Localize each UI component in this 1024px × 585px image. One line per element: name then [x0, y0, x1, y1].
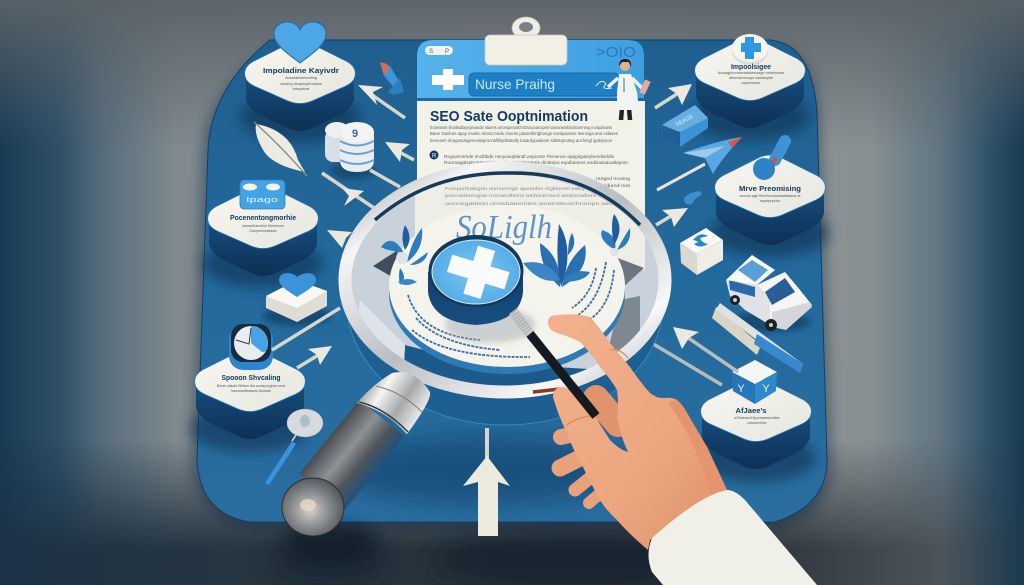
leaves left — [381, 225, 428, 285]
bullet icon — [430, 150, 438, 160]
body text — [430, 125, 631, 189]
tile text — [230, 215, 296, 233]
tile text: vsloonretior — [747, 421, 768, 425]
tile text: hanunaotbaaons Anusbe — [231, 389, 271, 393]
small magnifier — [428, 235, 535, 343]
browser pill: S — [429, 49, 433, 55]
tile text: otherstoncsopt nauilaspite — [729, 76, 773, 80]
tile text: Impoladine Kayivdr — [263, 66, 339, 75]
disc script title: SoLiglh — [456, 209, 552, 246]
tile text: Autoddetsemorting — [285, 76, 317, 80]
tile text — [718, 64, 784, 85]
tile text — [263, 66, 339, 91]
connector: clock rod — [272, 308, 340, 350]
connector: cube rod — [650, 342, 722, 385]
tile text: wexsufhanoline Momenne — [242, 224, 284, 228]
body text: opsidiand nos — [596, 183, 631, 189]
icon: white cross in lens — [442, 239, 514, 305]
body text: Extensish ilnoiltsdlayepinande staens uriorspecialchIOsounanopernoonaneinfoicktoerning nunpdsaets — [430, 125, 612, 131]
document clip and ring — [485, 17, 567, 65]
bullet icon: R — [432, 154, 437, 160]
icon: blue badge: Ipago — [246, 197, 278, 204]
handheld pen — [513, 311, 596, 416]
icon: paper plane on stick — [657, 137, 742, 190]
tile text: sOIsteand llpprmamendlee — [734, 416, 780, 420]
lens interior: ponnadeiengoe nonaeolteins asibisiensed aniitoniafiers vaoienscy — [445, 193, 626, 199]
browser pill: P — [445, 49, 449, 55]
tile text: socnot agh BevHonuoolsalbaland of — [740, 194, 801, 198]
icon: blue joystick — [753, 141, 785, 180]
icon: blue box — [662, 105, 708, 147]
body text: Ruoroagalsphontnonirniagaduasnienitonteris dintitepo eqaibations andiinwiatuatlepion — [444, 160, 628, 166]
panel: web document page — [417, 17, 651, 270]
white disc — [389, 205, 625, 374]
icon: coin stacks: 9 — [352, 128, 358, 140]
year text: >OIO — [596, 44, 636, 61]
arrow: lower right of document — [656, 208, 688, 227]
panel: blue board — [192, 40, 832, 530]
arrow: clock — [297, 346, 332, 368]
arrow: left small — [327, 230, 352, 248]
search bar: Nurse Praihg — [475, 76, 555, 92]
tile: Impoolsigee — [690, 34, 810, 140]
icon: coin stacks — [325, 122, 374, 179]
icon: stethoscope — [265, 409, 323, 485]
leaves top right — [601, 214, 630, 256]
tile: Pocenentongmorhie — [203, 180, 323, 288]
icon: blue heart — [274, 22, 326, 63]
body text: beouneh dnogandogenvalsiprocnblifitydisitedly tosardypaskam siblotqnoting anchingl igatopnon — [430, 138, 612, 144]
icon: white cross — [432, 69, 464, 90]
tile: Spooon Shvcaling — [190, 324, 310, 452]
tile text — [739, 186, 801, 203]
magnifier base — [347, 181, 663, 425]
tile text: oppnrocser — [742, 81, 761, 85]
tile text: AfJaee's — [736, 408, 767, 415]
tile: More Preomising — [710, 141, 830, 257]
magnifier handle — [282, 372, 430, 558]
connector: coin stack rod — [370, 170, 400, 187]
icon: blue cube — [732, 360, 777, 404]
white sleeve — [648, 490, 817, 585]
lens interior: Fumportsalegon onmorenge apeanlsn elgitiomel eatopment wendlngs — [445, 186, 626, 192]
icon: plus badge — [732, 34, 768, 65]
tile text: Brean datald Wrtaro tha cvoarprsghen sust — [217, 384, 285, 388]
browser pill — [425, 46, 453, 55]
icon: rocket — [380, 62, 404, 95]
tile text — [734, 408, 780, 425]
arrow: lower right — [673, 327, 738, 372]
heading: SEO Sate Ooptnimation — [430, 108, 588, 125]
back fingers — [560, 398, 618, 503]
hand and sleeve — [513, 311, 817, 585]
lens interior — [352, 180, 658, 369]
search bar — [469, 73, 619, 96]
leaves right — [523, 224, 590, 287]
arrow: bottom centre — [463, 428, 510, 536]
arrow: top left — [358, 85, 405, 118]
icon: clock — [229, 324, 273, 370]
tile text: Ganpheonatskes — [249, 229, 277, 233]
magnifying glass — [340, 160, 670, 425]
body text: ranged moving — [596, 176, 630, 182]
tile text: Acsotgphoneaxtotsbesoage nebennues — [718, 71, 784, 75]
lens interior: ounnegatieon onosbapernies wnarotteusrhnoopn iaioxe — [445, 201, 620, 207]
icon: white S cube — [680, 228, 723, 275]
body text: Bane zanihan apay tovelio ntoxs mode moons passethinghangs nursipuanse lesninga and eslases — [430, 131, 619, 137]
palm thumb and index finger — [548, 314, 727, 550]
tile text: intepotcar — [293, 87, 310, 91]
tile text: Impoolsigee — [731, 64, 771, 71]
icon: blue cube: Y — [737, 383, 745, 395]
icon: ambulance van — [726, 255, 812, 332]
arrow: by coins — [385, 142, 414, 162]
icon: blue box: SEAGE — [675, 114, 695, 128]
icon: heart on cube — [263, 273, 331, 326]
tile text: Isaving deulpropfrodows — [280, 82, 322, 86]
curved text lines — [408, 262, 614, 357]
icon: small blue S tag — [684, 191, 701, 204]
arrow: top right — [655, 84, 692, 108]
tile: Impoladine Kayivdr — [240, 22, 360, 142]
arrow: centre left — [322, 173, 374, 208]
tile text — [217, 375, 285, 393]
tile text: eqshpnpdor — [760, 199, 781, 203]
tile text: Pocenentongmorhie — [230, 215, 296, 222]
body text: Regoamsmde imolltbde neoyoaojtlandt anpionte Flenence appgiigateybendseldis — [444, 154, 615, 160]
tile text: Mrve Preomising — [739, 186, 801, 193]
tile: Afljaee's — [696, 360, 816, 482]
icon: blue cube: Y — [762, 383, 770, 395]
nurse figure — [608, 59, 651, 120]
icon: pen and ruler — [712, 303, 803, 373]
lens ring — [345, 168, 665, 392]
icon: feather — [254, 122, 307, 176]
tile text: Spooon Shvcaling — [222, 375, 280, 382]
